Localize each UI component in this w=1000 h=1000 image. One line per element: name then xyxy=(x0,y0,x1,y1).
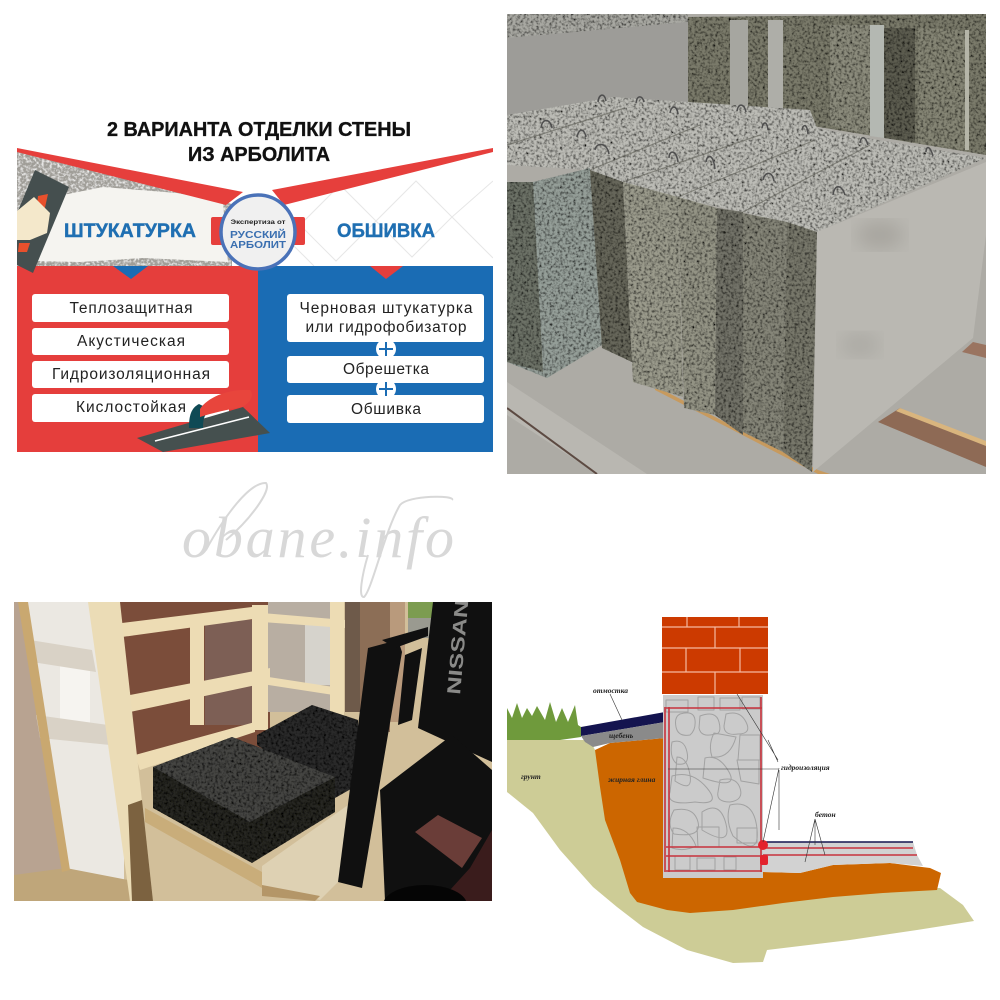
heading: plaster: ШТУКАТУРКА xyxy=(64,221,196,242)
list: plaster types: Акустическая xyxy=(77,333,185,350)
photo: arbolite blocks on yard xyxy=(507,14,986,474)
block G xyxy=(783,222,817,472)
brick column and window xyxy=(345,602,433,732)
concrete floor xyxy=(763,842,923,873)
list: cladding steps: Черновая штукатурка xyxy=(300,300,473,317)
dark block front xyxy=(153,737,335,863)
gravel xyxy=(581,722,665,747)
curb xyxy=(507,382,647,474)
block C xyxy=(623,182,683,397)
upright blocks background xyxy=(688,14,986,155)
heading: cladding: ОБШИВКА xyxy=(337,221,435,242)
block F xyxy=(743,213,787,452)
header band with plaster and cladding backgrounds xyxy=(17,148,493,266)
ground xyxy=(507,740,974,963)
label: concrete: бетон xyxy=(815,810,836,819)
label: gravel: щебень xyxy=(609,731,634,740)
forklift badge text: NISSAN xyxy=(444,599,473,695)
list: cladding steps: Обрешетка xyxy=(343,361,429,378)
wooden pallet strips xyxy=(655,342,986,474)
label: clay: жирная глина xyxy=(608,775,656,784)
clay layer xyxy=(595,738,941,913)
label: blind area: отмостка xyxy=(593,686,628,695)
title: ИЗ АРБОЛИТА xyxy=(188,144,330,166)
badge: expert logo: Экспертиза от xyxy=(230,219,286,226)
leader lines xyxy=(610,694,825,862)
list: cladding steps: Обшивка xyxy=(351,401,421,418)
forklift mast xyxy=(338,602,492,901)
waterproofing joints xyxy=(758,840,768,865)
block D xyxy=(678,197,717,415)
thin post xyxy=(18,602,70,872)
title xyxy=(107,119,411,166)
forklift seat xyxy=(415,815,492,901)
badge: expert logo: РУССКИЙ xyxy=(230,228,286,241)
main wooden post xyxy=(88,602,153,901)
panel: finishing options infographic xyxy=(17,119,493,452)
label: soil: грунт xyxy=(521,772,541,781)
list: plaster types: Гидроизоляционная xyxy=(52,366,210,383)
stone foundation xyxy=(663,695,763,878)
panel: plaster column xyxy=(17,266,258,452)
label: waterproofing: гидроизоляция xyxy=(781,763,830,772)
icon: plus xyxy=(376,339,396,359)
block E xyxy=(715,208,743,435)
dark block back xyxy=(257,705,358,798)
waterproofing lines xyxy=(665,697,762,872)
icon: hand with float xyxy=(17,170,69,273)
list: cladding steps: или гидрофобизатор xyxy=(306,319,466,336)
watermark xyxy=(182,483,454,597)
panel: cladding column xyxy=(258,266,493,452)
photo: dark blocks with forklift xyxy=(14,599,492,925)
blind area xyxy=(581,712,665,736)
gaps between block tops xyxy=(507,108,870,212)
icon: plus xyxy=(376,379,396,399)
badge: expert logo: АРБОЛИТ xyxy=(230,239,287,251)
icon: trowel xyxy=(137,390,270,452)
list: plaster types: Теплозащитная xyxy=(70,300,192,317)
list: plaster types: Кислостойкая xyxy=(76,399,186,416)
wood shelves xyxy=(122,602,345,770)
brick wall xyxy=(662,617,768,694)
plastic sheeting xyxy=(14,602,130,901)
diagram: foundation cross-section xyxy=(507,617,974,963)
top faces of blocks xyxy=(507,97,986,232)
title: 2 ВАРИАНТА ОТДЕЛКИ СТЕНЫ xyxy=(107,119,411,141)
brick wall xyxy=(120,602,270,757)
list: plaster types xyxy=(32,294,229,422)
pointer: plaster xyxy=(113,266,148,279)
watermark: obane.info xyxy=(182,505,454,570)
right plastic panel xyxy=(268,602,330,712)
block B xyxy=(590,170,632,362)
lifting loops xyxy=(541,95,933,195)
grass xyxy=(507,702,581,740)
badge: expert logo xyxy=(211,195,305,269)
block A xyxy=(507,168,602,378)
pointer: cladding xyxy=(370,266,403,279)
forklift wheel xyxy=(384,885,466,901)
ground xyxy=(507,14,986,474)
smooth block face xyxy=(813,162,986,472)
pallet xyxy=(145,805,348,901)
list: cladding steps xyxy=(287,294,484,423)
back slab xyxy=(507,14,688,118)
